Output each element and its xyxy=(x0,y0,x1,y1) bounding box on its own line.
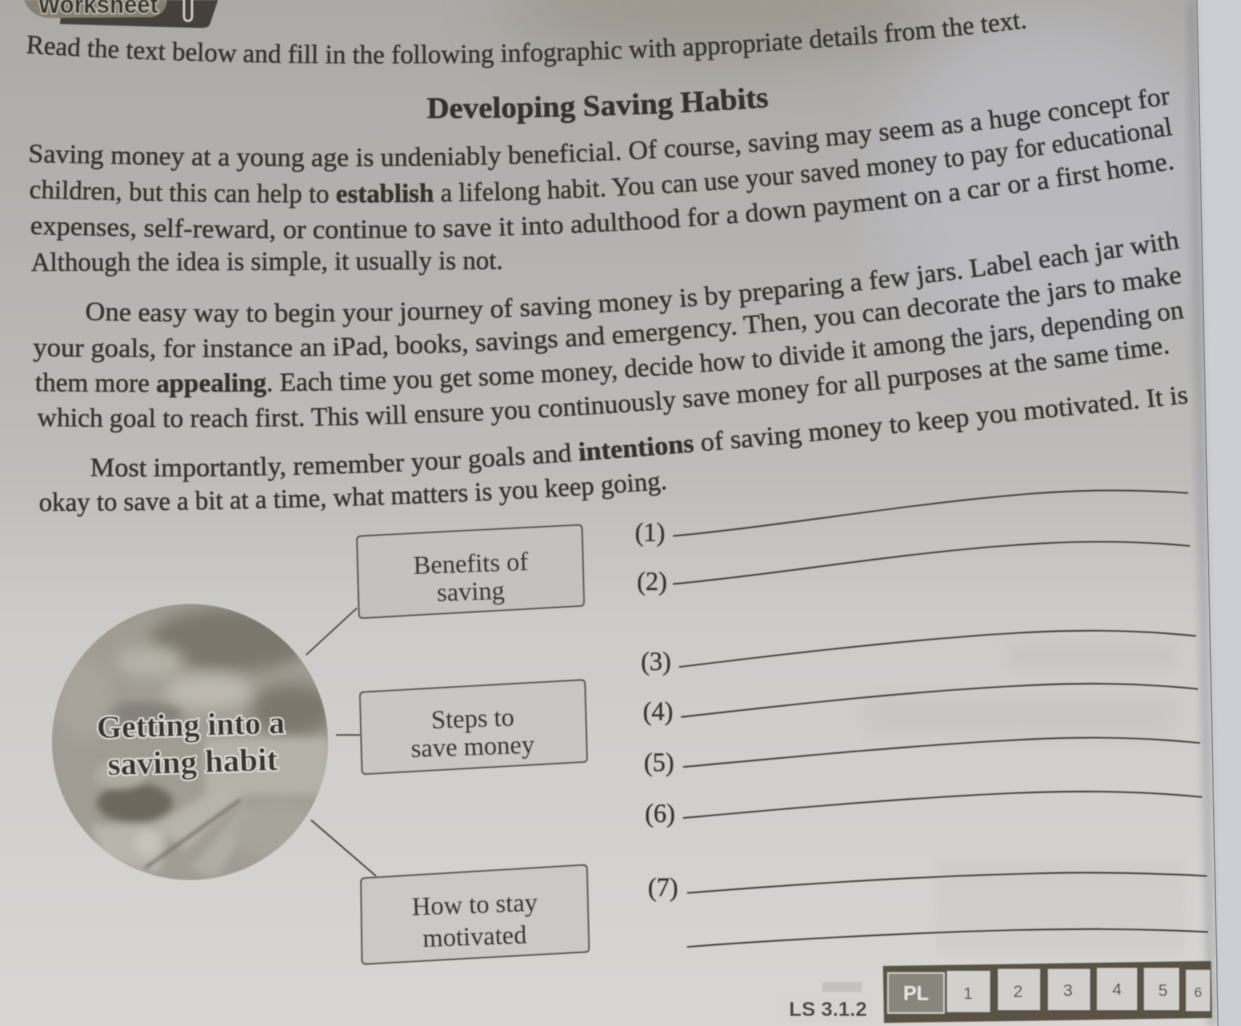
learning standard label xyxy=(777,982,872,1023)
answer labels xyxy=(635,518,678,902)
worksheet tag xyxy=(24,0,218,28)
reading passage xyxy=(29,88,1188,558)
performance level bar: 3 xyxy=(1063,981,1073,1000)
instruction text: Read the text below and fill in the following infographic with appropriate details from the text. xyxy=(26,13,1026,69)
reading passage: your goals, for instance an iPad, books, savings and emergency. Then, you can decorate the jars to make xyxy=(32,266,1182,364)
reading passage: which goal to reach first. This will ensure you continuously save money for all purposes at the same time. xyxy=(36,340,1170,434)
reading passage: Although the idea is simple, it usually is not. xyxy=(30,250,502,278)
box: benefits of saving: saving xyxy=(436,576,505,607)
reading passage: Saving money at a young age is undeniably beneficial. Of course, saving may seem as a huge concept for xyxy=(29,88,1170,173)
answer labels: (4) xyxy=(643,697,673,726)
performance level bar: 2 xyxy=(1013,982,1023,1001)
performance level bar xyxy=(883,961,1212,1023)
photo of coins in hand xyxy=(50,600,334,885)
performance level bar: 5 xyxy=(1158,981,1168,1000)
answer labels: (6) xyxy=(645,799,675,828)
circle title xyxy=(96,704,285,782)
connector lines xyxy=(306,608,376,876)
learning standard label: LS 3.1.2 xyxy=(789,999,867,1021)
box: how to stay motivated: How to stay xyxy=(411,888,538,921)
circle title: saving habit xyxy=(107,741,278,782)
box: how to stay motivated: motivated xyxy=(422,920,527,953)
reading passage: okay to save a bit at a time, what matters is you keep going. xyxy=(39,473,666,518)
reading passage: Most importantly, remember your goals and intentions of saving money to keep you motivated. It is xyxy=(90,386,1188,483)
heading: Developing Saving Habits xyxy=(426,87,769,125)
performance level bar: 6 xyxy=(1194,984,1202,1000)
performance level bar: PL xyxy=(903,983,929,1005)
answer labels: (7) xyxy=(648,873,678,902)
answer labels: (3) xyxy=(641,647,671,676)
central circle: getting into a saving habit xyxy=(50,600,334,885)
performance level bar: 4 xyxy=(1112,980,1122,999)
box: benefits of saving xyxy=(357,525,584,618)
reading passage: children, but this can help to establish a lifelong habit. You can use your saved money to pay for educational xyxy=(29,116,1174,209)
box: benefits of saving: Benefits of xyxy=(413,547,529,580)
box: steps to save money: save money xyxy=(411,730,535,763)
answer labels: (2) xyxy=(637,567,667,596)
reading passage: expenses, self-reward, or continue to save it into adulthood for a down payment on a car or a first home. xyxy=(30,158,1174,243)
circle title: Getting into a xyxy=(96,704,285,745)
answer labels: (1) xyxy=(635,518,665,547)
answer labels: (5) xyxy=(644,748,674,777)
performance level bar: 1 xyxy=(963,984,973,1003)
reading passage: One easy way to begin your journey of saving money is by preparing a few jars. Label each jar with xyxy=(85,230,1180,328)
answer lines xyxy=(673,491,1208,947)
reading passage: them more appealing. Each time you get some money, decide how to divide it among the jars, depending on xyxy=(34,305,1185,398)
box: steps to save money: Steps to xyxy=(431,703,515,734)
box: how to stay motivated xyxy=(361,865,589,964)
box: steps to save money xyxy=(360,680,587,774)
